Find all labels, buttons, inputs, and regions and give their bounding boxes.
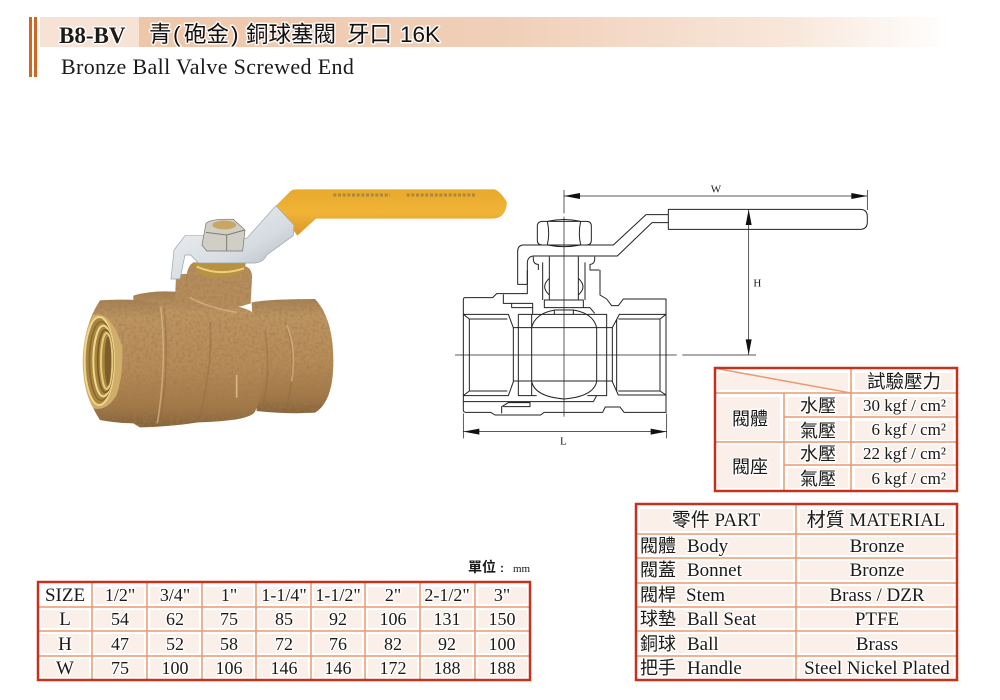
hex nut (202, 219, 245, 251)
H row (58, 634, 516, 655)
size header row: SIZE (45, 585, 85, 606)
materials: Steel Nickel Plated (804, 658, 950, 679)
materials: Bronze (850, 536, 904, 557)
valve photo (83, 189, 507, 427)
L row: 54 (111, 609, 129, 629)
width dimension (564, 184, 867, 213)
pressure values: 22 kgf / cm² (863, 444, 946, 463)
port rim (83, 315, 122, 409)
central body (133, 291, 266, 427)
pressure table border (715, 368, 957, 491)
L row: 62 (166, 609, 184, 629)
height dimension: H (753, 277, 761, 289)
part names: 閥蓋 (640, 560, 676, 580)
size header row: 1/2" (105, 585, 135, 605)
pressure values: 6 kgf / cm² (872, 420, 946, 439)
size header row (45, 585, 510, 606)
L row: 85 (275, 609, 293, 629)
materials: PTFE (855, 609, 899, 630)
body outline (463, 270, 666, 415)
W row: 146 (270, 658, 298, 678)
chinese title: 砲金 (184, 22, 229, 47)
length dimension: L (560, 435, 567, 447)
materials: Brass / DZR (830, 585, 925, 606)
part names: 閥桿 (640, 585, 676, 605)
materials: Bronze (850, 560, 904, 581)
size table border (38, 582, 530, 680)
part names: Stem (686, 585, 725, 606)
pressure values (863, 396, 946, 488)
W row: 106 (216, 658, 242, 678)
chinese title: 青 (149, 22, 172, 47)
pressure table header: 試驗壓力 (867, 371, 941, 392)
pressure values: 6 kgf / cm² (872, 469, 946, 488)
handle grip (276, 189, 507, 236)
unit note: mm (513, 563, 531, 575)
medium labels: 水壓 (800, 444, 836, 464)
H row: 58 (220, 634, 238, 654)
medium labels: 氣壓 (800, 421, 836, 441)
H row: 72 (275, 634, 293, 654)
row label: body: 閥體 (732, 409, 768, 429)
handle lettering (333, 190, 477, 199)
size header row: 1" (221, 585, 237, 605)
threaded ports (463, 314, 666, 396)
lever and stop tab (171, 206, 294, 279)
size table grid (38, 582, 530, 680)
technical drawing (455, 184, 867, 447)
L row: 150 (488, 609, 516, 629)
body ridge shading (160, 308, 292, 423)
W row: 100 (162, 658, 188, 678)
parts table grid (636, 504, 957, 680)
size header row: 2-1/2" (424, 585, 470, 605)
part names: Ball (687, 634, 719, 655)
size header row: 3/4" (160, 585, 190, 605)
L row: 75 (220, 609, 238, 629)
length dimension (463, 413, 667, 447)
part names: Bonnet (687, 560, 743, 581)
row label: seat: 閥座 (732, 457, 768, 477)
internal thread (84, 316, 115, 406)
L row: 131 (434, 609, 460, 629)
part names: Handle (687, 658, 742, 679)
pressure table cells (718, 373, 953, 488)
size header row: 1-1/4" (261, 585, 307, 605)
model code: B8-BV (59, 23, 126, 48)
materials (804, 536, 950, 679)
part names: Ball Seat (687, 609, 757, 630)
part names (640, 536, 757, 679)
parts table cells (640, 509, 953, 677)
part names: 銅球 (640, 634, 676, 654)
neck (175, 262, 252, 309)
chinese title: ) (231, 22, 238, 47)
H row: H (58, 634, 72, 655)
H row: 47 (111, 634, 129, 654)
height dimension (682, 209, 761, 355)
L row (59, 609, 516, 630)
ball and seats (513, 310, 612, 399)
medium labels: 氣壓 (800, 469, 836, 489)
parts header: 零件 PART (672, 509, 761, 531)
materials: Brass (856, 634, 898, 655)
pressure values: 30 kgf / cm² (863, 396, 946, 415)
W row: 188 (488, 658, 516, 678)
H row: 92 (438, 634, 456, 654)
collar highlight (197, 267, 244, 272)
lever outline (518, 209, 867, 284)
W row: 146 (324, 658, 352, 678)
size header row: 1-1/2" (315, 585, 361, 605)
part names: 球墊 (640, 609, 676, 629)
chinese title: 16K (400, 22, 440, 47)
part names: 把手 (640, 658, 676, 678)
nut facets (206, 230, 245, 251)
stem and packing (533, 257, 599, 308)
chinese title: ( (173, 22, 181, 47)
title band (40, 17, 950, 47)
page header (29, 17, 950, 79)
part names: Body (687, 536, 729, 557)
H row: 82 (384, 634, 402, 654)
W row: W (56, 658, 74, 679)
parts and materials table (636, 504, 957, 680)
H row: 100 (488, 634, 516, 654)
nut top (212, 221, 236, 229)
medium labels: 水壓 (800, 396, 836, 416)
H row: 52 (166, 634, 184, 654)
english subtitle: Bronze Ball Valve Screwed End (61, 54, 354, 79)
right end (252, 299, 333, 413)
W row: 172 (380, 658, 406, 678)
chinese title: 銅球塞閥 (246, 22, 336, 47)
W row (56, 658, 516, 679)
width dimension: W (711, 184, 722, 196)
hex nut outline (537, 219, 591, 247)
centre lines (455, 217, 677, 417)
material header: 材質 MATERIAL (807, 509, 945, 531)
left end (83, 300, 167, 425)
L row: 106 (380, 609, 406, 629)
W row: 75 (111, 658, 129, 678)
unit note: : (500, 561, 504, 575)
size header row: 2" (385, 585, 401, 605)
accent bars (29, 17, 37, 77)
size header row: 3" (494, 585, 510, 605)
parts table border (636, 504, 957, 680)
chinese title: 牙口 (347, 22, 392, 47)
unit note: 單位 (468, 559, 496, 575)
size table (38, 582, 530, 680)
body ridge highlights (157, 298, 293, 423)
W row: 188 (434, 658, 460, 678)
brass stem collar (193, 262, 246, 278)
H row: 76 (329, 634, 347, 654)
L row: 92 (329, 609, 347, 629)
lower body details (463, 396, 597, 413)
casting mark (234, 375, 239, 398)
L row: L (59, 609, 71, 630)
part names: 閥體 (640, 536, 676, 556)
pressure table (715, 368, 957, 491)
medium labels (800, 396, 836, 489)
pressure table grid (715, 368, 957, 491)
size table cells (41, 587, 527, 677)
